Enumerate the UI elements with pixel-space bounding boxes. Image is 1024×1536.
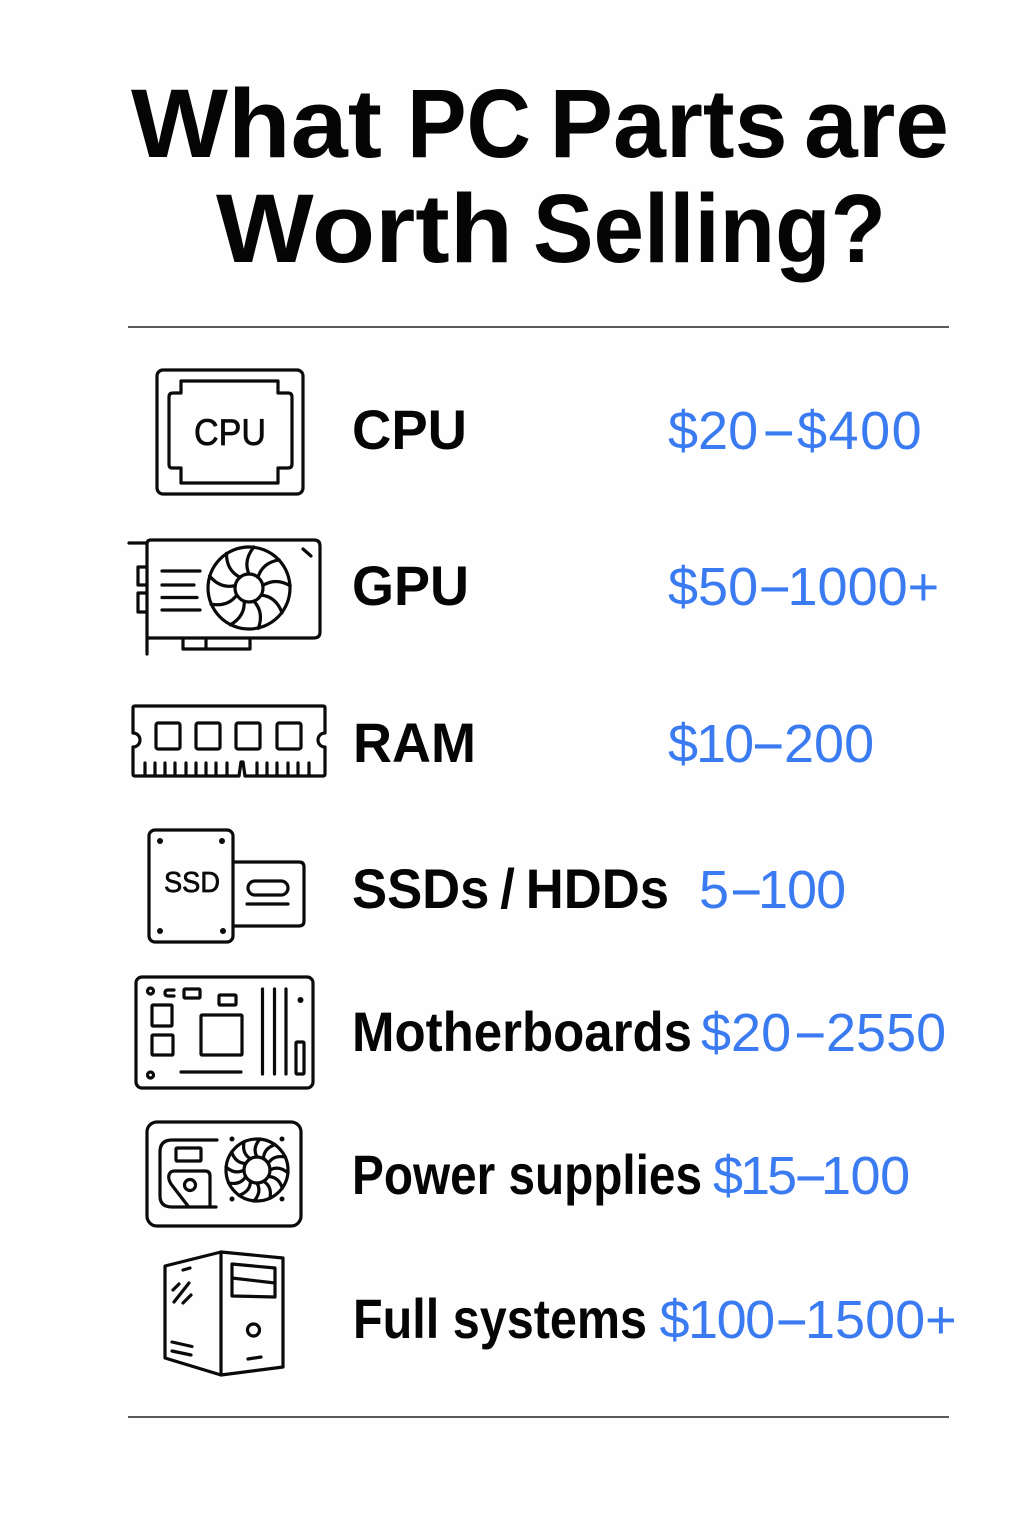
price: Motherboards: 2550 [826, 1003, 946, 1063]
price: RAM: $10 [668, 714, 752, 774]
row: SSDs / HDDs [149, 830, 845, 942]
price: SSDs / HDDs: 100 [758, 860, 845, 920]
row: GPU [129, 540, 939, 654]
icon: SSD drive: SSD [164, 867, 220, 899]
price: Power supplies: 100 [821, 1146, 910, 1206]
icon: power supply [147, 1122, 301, 1226]
label: GPU: GPU [352, 554, 469, 617]
price: Power supplies: $15 [713, 1146, 795, 1206]
title: are [804, 69, 949, 178]
row: Motherboards [136, 977, 946, 1088]
icon: graphics card [129, 540, 320, 654]
icon: CPU chip [157, 370, 303, 494]
price: RAM: 200 [784, 714, 874, 774]
icon: SSD drive [149, 830, 304, 942]
icon: motherboard [136, 977, 313, 1088]
label: Power supplies: Power supplies [352, 1143, 702, 1206]
price: GPU: $50 [668, 557, 758, 617]
title: Selling? [533, 174, 886, 283]
price: Full systems: 1500+ [805, 1290, 957, 1350]
price: Power supplies: – [798, 1148, 824, 1200]
row: Full systems [165, 1252, 957, 1375]
label: SSDs / HDDs: SSDs / HDDs [352, 857, 669, 920]
price: CPU: $400 [797, 401, 923, 461]
row: RAM [133, 706, 874, 776]
price: SSDs / HDDs: – [734, 862, 760, 914]
price: Full systems: – [779, 1292, 805, 1344]
title: Worth [216, 174, 513, 283]
icon: desktop tower [165, 1252, 283, 1375]
price: CPU: $20 [668, 401, 758, 461]
label: RAM: RAM [353, 711, 476, 774]
price: Motherboards: – [798, 1005, 824, 1057]
price: RAM: – [756, 716, 782, 768]
price: GPU: – [762, 559, 788, 611]
price: SSDs / HDDs: 5 [699, 860, 729, 920]
row: CPU [157, 370, 923, 494]
price: Motherboards: $20 [701, 1003, 791, 1063]
price: Full systems: $100 [660, 1290, 774, 1350]
label: Motherboards: Motherboards [352, 1000, 692, 1063]
price: GPU: 1000+ [788, 557, 939, 617]
title: Parts [550, 69, 788, 178]
icon: CPU chip: CPU [194, 412, 266, 453]
row: Power supplies [147, 1122, 910, 1226]
icon: memory module [133, 706, 325, 776]
label: CPU: CPU [352, 398, 467, 461]
price: CPU: – [766, 403, 792, 455]
title: What [131, 69, 382, 178]
title [131, 69, 949, 283]
title: PC [407, 69, 531, 178]
label: Full systems: Full systems [353, 1287, 647, 1350]
